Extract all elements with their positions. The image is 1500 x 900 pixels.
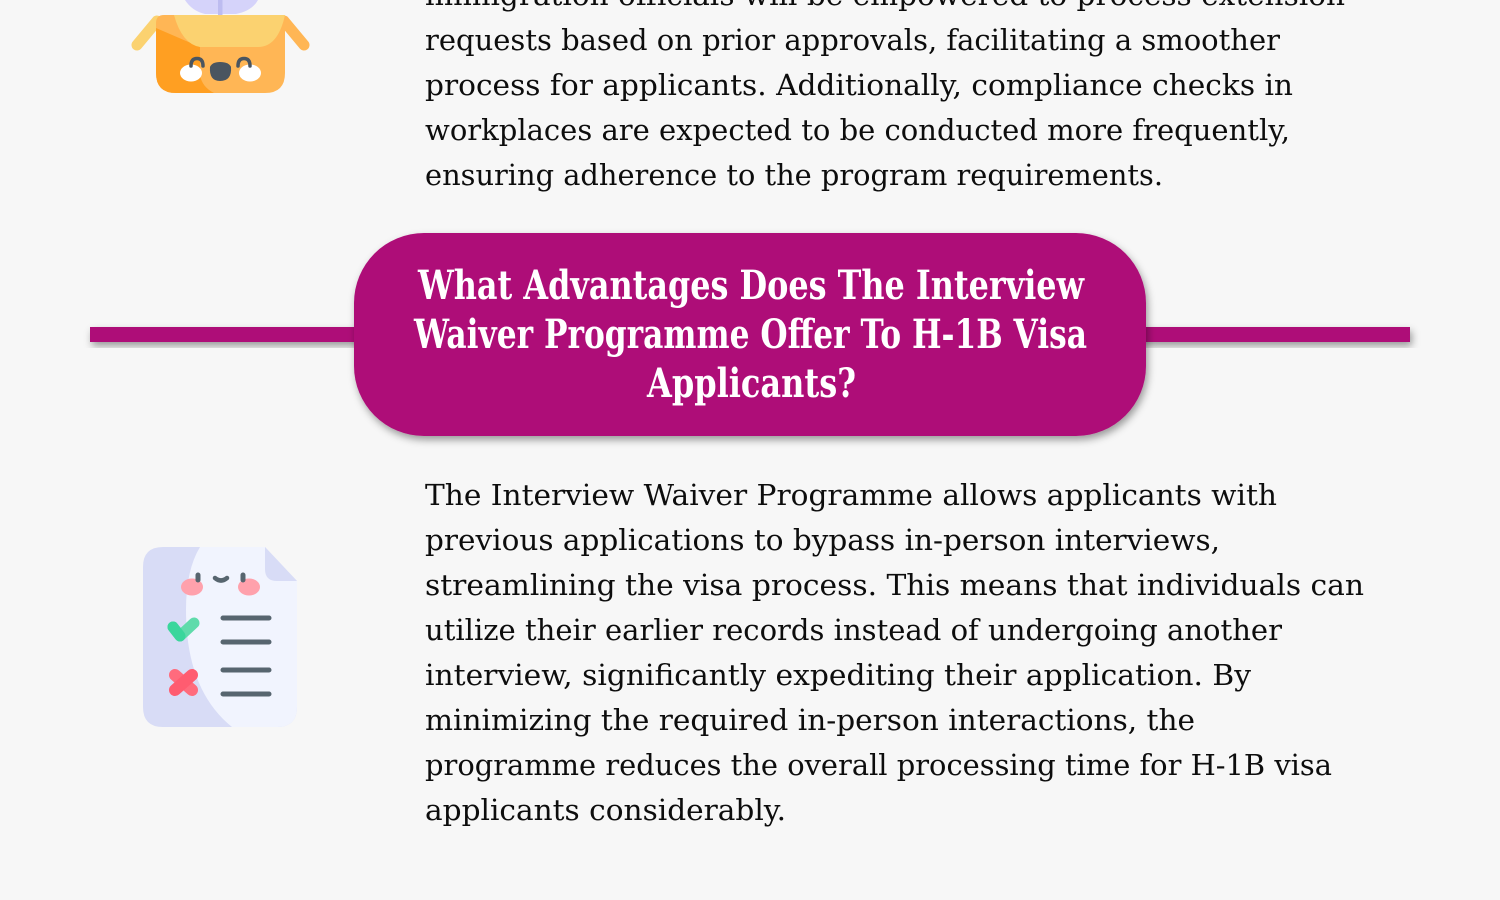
body text: top paragraph: workplaces are expected to be conducted more frequently, bbox=[425, 113, 1290, 147]
body text: bottom paragraph bbox=[425, 478, 1364, 827]
body text: top paragraph: requests based on prior approvals, facilitating a smoother bbox=[425, 23, 1280, 57]
heading text: Applicants? bbox=[646, 360, 856, 407]
heading text: Waiver Programme Offer To H-1B Visa bbox=[413, 311, 1087, 358]
body text: top paragraph bbox=[425, 0, 1345, 192]
body text: bottom paragraph: previous applications to bypass in-person interviews, bbox=[425, 523, 1220, 557]
body text: bottom paragraph: minimizing the required in-person interactions, the bbox=[425, 703, 1195, 737]
body text: bottom paragraph: programme reduces the overall processing time for H-1B visa bbox=[425, 748, 1332, 782]
heading text bbox=[413, 262, 1087, 407]
body text: bottom paragraph: utilize their earlier records instead of undergoing another bbox=[425, 613, 1282, 647]
body text: bottom paragraph: The Interview Waiver Programme allows applicants with bbox=[425, 478, 1277, 512]
body text: bottom paragraph: streamlining the visa process. This means that individuals can bbox=[425, 568, 1364, 602]
body text: bottom paragraph: interview, significantly expediting their application. By bbox=[425, 658, 1252, 692]
heading divider bar bbox=[90, 327, 1410, 342]
body text: top paragraph: process for applicants. Additionally, compliance checks in bbox=[425, 68, 1293, 102]
body text: bottom paragraph: applicants considerably. bbox=[425, 793, 786, 827]
icon: open box with face bbox=[137, 0, 304, 93]
body text: top paragraph: ensuring adherence to the program requirements. bbox=[425, 158, 1163, 192]
icon: checklist document with face bbox=[143, 547, 297, 727]
heading text: What Advantages Does The Interview bbox=[417, 262, 1085, 309]
heading pill bbox=[354, 233, 1146, 436]
